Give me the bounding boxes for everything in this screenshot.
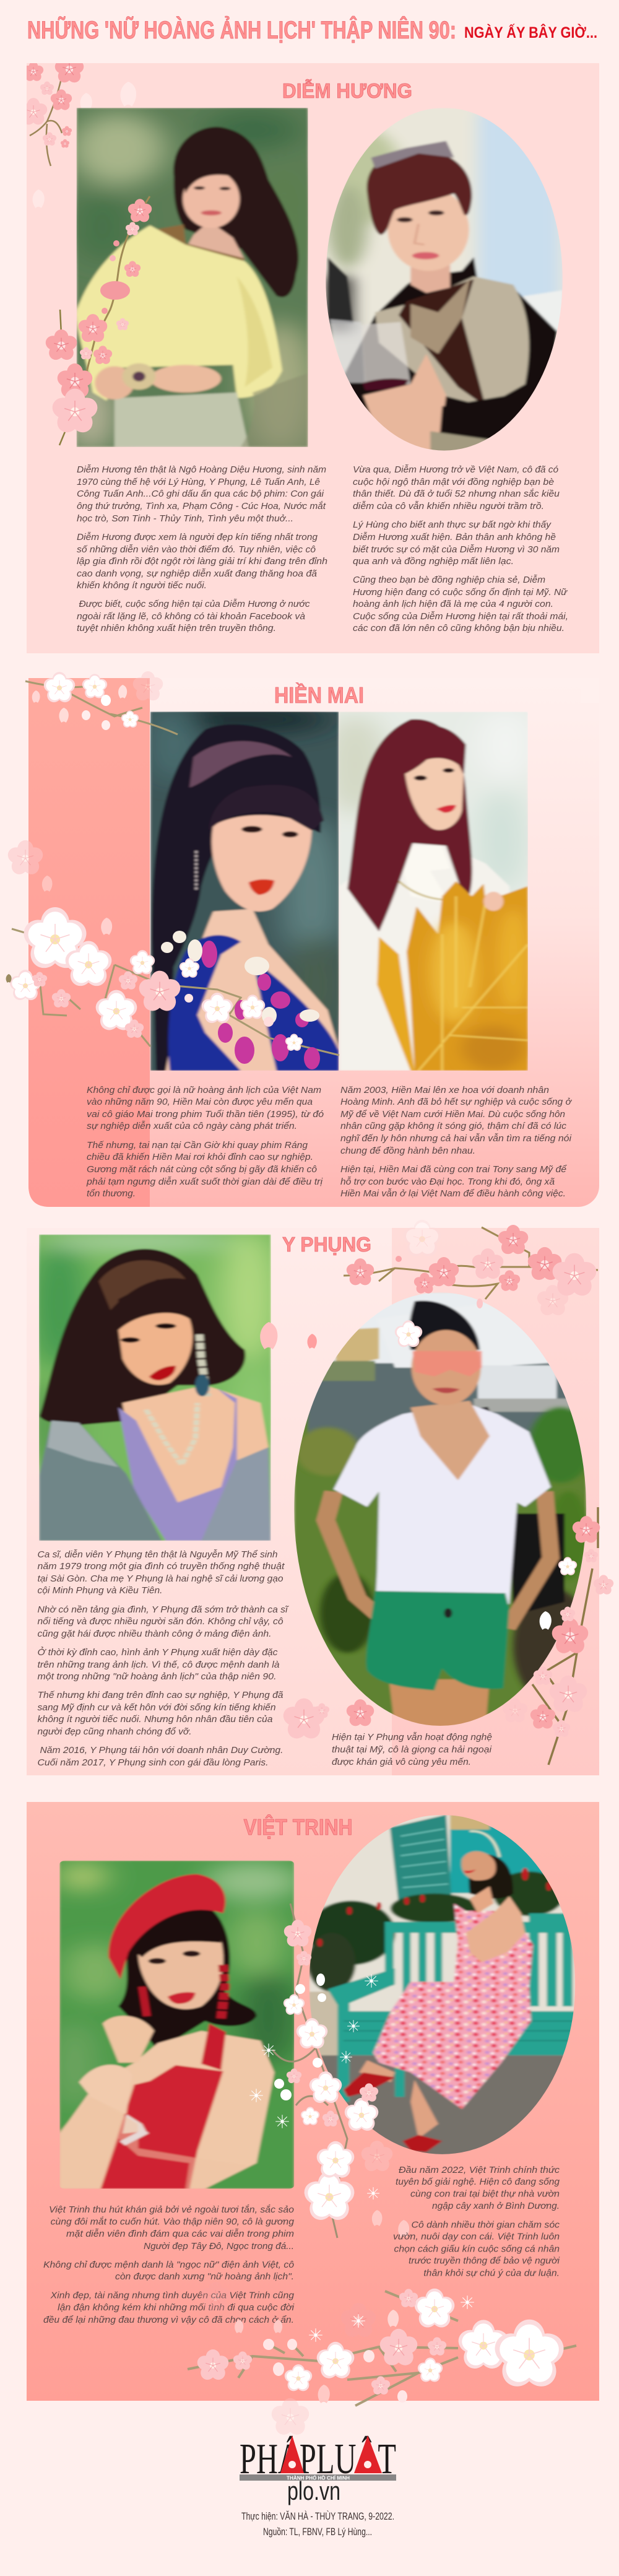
text: Diễm Hương left column: Diễm Hương tên thật là Ngô Hoàng Diệu Hương, sinh năm <box>77 464 326 475</box>
text: Diễm Hương left column: 1970 cùng thế hệ với Lý Hùng, Y Phụng, Lê Tuấn Anh, Lê <box>77 477 320 487</box>
text: Y Phụng left column: năm 1979 trong một gia đình có truyền thống nghệ thuật <box>37 1561 285 1572</box>
text: Hiền Mai left column: vai cô giáo Mai trong phim Tuổi thần tiên (1995), từ đó <box>87 1109 324 1120</box>
text: Y Phụng right column: thuật tại Mỹ, cô là giọng ca hải ngoại <box>332 1744 492 1755</box>
text: Y Phụng left column: nổi tiếng và được nhiều người săn đón. Không chỉ vậy, cô <box>37 1616 284 1627</box>
text: Y Phụng left column: cội Minh Phụng và Kiều Tiên. <box>37 1585 162 1596</box>
text: Việt Trinh left column: cùng đôi mắt to cuốn hút. Vào thập niên 90, cô là gương <box>51 2217 295 2227</box>
text: Hiền Mai left column: chiều đã khiến Hiền Mai rơi khỏi đỉnh cao sự nghiệp. <box>87 1152 313 1162</box>
text: Hiền Mai left column: tổn thương. <box>87 1188 136 1199</box>
title subtitle: NGÀY ẤY BÂY GIỜ... <box>464 23 597 41</box>
text: Y Phụng left column: trên những trang ảnh lịch. Vì thế, cô được mệnh danh là <box>37 1660 280 1670</box>
text: Diễm Hương left column: Công Tuấn Anh...Cô ghi dấu ấn qua các bộ phim: Con gái <box>77 489 324 499</box>
photo: present-day Hiền Mai with golden leaves <box>339 712 528 1071</box>
text: Việt Trinh right column <box>393 2165 560 2279</box>
text: Hiền Mai right column: Mỹ để về Việt Nam cưới Hiền Mai. Dù cuộc sống hôn <box>340 1109 565 1120</box>
text: Y Phụng left column: tại Sài Gòn. Cha mẹ Y Phụng là hai nghệ sĩ cải lương gạo <box>37 1573 284 1584</box>
logo url: plo.vn <box>287 2476 340 2505</box>
decoration: Y Phụng top blossom branch <box>344 1220 599 1318</box>
logo: Pháp Luật: PHÁPLUẬT <box>240 2435 396 2483</box>
text: Diễm Hương left column: ông thứ trưởng, Tình xa, Phạm Công - Cúc Hoa, Nước mắt <box>77 501 326 511</box>
text: Hiền Mai right column: nghĩ đến ly hôn nhưng cả hai vẫn vẫn tìm ra tiếng nói <box>340 1133 572 1144</box>
title main line: NHỮNG 'NỮ HOÀNG ẢNH LỊCH' THẬP NIÊN 90: <box>27 15 456 44</box>
text: Việt Trinh right column: trước truyền thông để bảo vệ người <box>409 2256 560 2266</box>
logo: Pháp Luật: THÀNH PHỐ HỒ CHÍ MINH <box>287 2474 350 2481</box>
text: Diễm Hương right column: hoàng ảnh lịch hiện đã là mẹ của 4 người con. <box>353 599 553 609</box>
panel: Y Phụng <box>27 1220 615 1775</box>
text: Y Phụng left column: Ở thời kỳ đỉnh cao, hình ảnh Y Phụng xuất hiện dày đặc <box>37 1647 278 1658</box>
text: Y Phụng left column: Cuối năm 2017, Y Phụng sinh con gái đầu lòng Paris. <box>37 1757 269 1768</box>
heading: Y Phụng: Y PHỤNG <box>282 1233 371 1256</box>
text: Diễm Hương right column: diễm của cô vẫn khiến nhiều người trầm trồ. <box>353 501 544 511</box>
decoration: Hiền Mai top blossom branch <box>25 671 178 734</box>
text: Diễm Hương right column <box>353 464 568 633</box>
text: Y Phụng right column <box>332 1732 492 1767</box>
text: Diễm Hương left column: ngoài rất lặng lẽ, cô không có tài khoản Facebook và <box>77 611 305 622</box>
text: Y Phụng left column: Thế nhưng khi đang trên đỉnh cao sự nghiệp, Y Phụng đã <box>37 1690 284 1700</box>
decoration: Y Phụng right vertical branch <box>281 1507 615 1765</box>
photo: young Y Phụng with green background <box>28 1230 276 1541</box>
heading: Việt Trinh: VIỆT TRINH <box>244 1814 353 1840</box>
text: Việt Trinh right column: vườn, nuôi dạy con cái. Việt Trinh luôn <box>393 2232 560 2242</box>
text: Diễm Hương right column: Cuộc sống của Diễm Hương hiện tại rất thoải mái, <box>353 611 568 622</box>
text: Y Phụng right column: được khán giả vô cùng yêu mến. <box>332 1757 471 1767</box>
text: Việt Trinh left column: Xinh đẹp, tài năng nhưng tình duyên của Việt Trinh cũng <box>50 2291 295 2301</box>
text: Diễm Hương left column: tuyệt nhiên không xuất hiện trên truyền thông. <box>77 623 276 633</box>
text: Hiền Mai left column <box>86 1085 324 1199</box>
text: Y Phụng left column: cũng gặt hái được nhiều thành công ở mảng điện ảnh. <box>37 1629 271 1639</box>
credits: Thực hiện: VĂN HÀ - THÙY TRANG, 9-2022. <box>241 2510 394 2522</box>
text: Diễm Hương left column <box>77 464 327 633</box>
decoration: top-left blossom branch <box>27 63 136 208</box>
photo: present-day Y Phụng in oval <box>294 1292 592 1728</box>
text: Diễm Hương right column: Diễm Hương xuất hiện. Bản thân anh không hề <box>353 532 556 542</box>
text: Hiền Mai right column <box>340 1085 573 1199</box>
decoration: Việt Trinh central blossom branch <box>249 1904 409 2238</box>
photo: present-day Việt Trinh on teal bench in oval <box>308 1815 576 2156</box>
decoration: Hiền Mai faint blossom <box>6 840 53 892</box>
text: Y Phụng left column: Năm 2016, Y Phụng tái hôn với doanh nhân Duy Cường. <box>40 1745 284 1756</box>
text: Diễm Hương right column: Cũng theo bạn bè đồng nghiệp chia sẻ, Diễm <box>353 575 545 585</box>
credits: Nguồn: TL, FBNV, FB Lý Hùng... <box>263 2526 372 2538</box>
text: Việt Trinh right column: Đầu năm 2022, Việt Trinh chính thức <box>399 2165 560 2175</box>
text: Việt Trinh left column: Việt Trinh thu hút khán giả bởi vẻ ngoài tươi tắn, sắc sảo <box>49 2204 294 2215</box>
photo: young Hiền Mai in blue dress <box>150 704 344 1071</box>
photo: young Việt Trinh in red beret <box>55 1861 300 2189</box>
text: Diễm Hương right column: Vừa qua, Diễm Hương trở về Việt Nam, cô đã có <box>353 464 558 475</box>
text: Việt Trinh right column: ngập cây xanh ở Bình Dương. <box>432 2201 560 2211</box>
panel: Việt Trinh <box>27 1802 599 2406</box>
text: Việt Trinh right column: Cô dành nhiều thời gian chăm sóc <box>411 2220 560 2230</box>
photo: present-day Diễm Hương in oval <box>326 108 563 453</box>
text: Hiền Mai left column: phải tạm ngưng diễn xuất suốt thời gian dài để điều trị <box>86 1177 323 1187</box>
text: Y Phụng left column: Nhờ có nền tảng gia đình, Y Phụng đã sớm trở thành ca sĩ <box>37 1604 289 1615</box>
text: Hiền Mai right column: Hiện tại, Hiền Mai đã cùng con trai Tony sang Mỹ để <box>340 1164 567 1175</box>
text: Diễm Hương right column: biết trước sự có mặt của Diễm Hương vì 30 năm <box>353 544 560 555</box>
footer <box>240 2435 396 2538</box>
panel: Diễm Hương <box>18 54 599 653</box>
text: Diễm Hương left column: số những diễn viên vào thời điểm đó. Tuy nhiên, việc cô <box>77 544 316 555</box>
text: Hiền Mai right column: nhân cũng gặp không ít sóng gió, thậm chí đã có lúc <box>340 1121 567 1131</box>
text: Diễm Hương left column: khiến không ít người tiếc nuối. <box>77 580 207 591</box>
text: Việt Trinh left column: mặt diễn viên đình đám qua các vai diễn trong phim <box>66 2229 294 2239</box>
decoration: Việt Trinh bottom blossom branch <box>188 2282 576 2406</box>
title <box>27 15 597 44</box>
text: Diễm Hương left column: học trò, Sơn Tinh - Thủy Tinh, Tình yêu một thuở... <box>77 513 293 524</box>
heading: Diễm Hương: DIỄM HƯƠNG <box>282 79 412 102</box>
text: Y Phụng left column: Ca sĩ, diễn viên Y Phụng tên thật là Nguyễn Mỹ Thể sinh <box>37 1549 277 1560</box>
text: Việt Trinh right column: cùng con trai tại biệt thự nhà vườn <box>410 2188 560 2200</box>
text: Diễm Hương right column: thân thiết. Dù đã ở tuổi 52 nhưng nhan sắc kiều <box>353 489 560 499</box>
text: Diễm Hương left column: cao danh vọng, sự nghiệp diễn xuất đang thăng hoa đã <box>77 568 318 579</box>
text: Diễm Hương right column: cuộc hội ngộ thân mật với đồng nghiệp bạn bè <box>353 477 554 487</box>
logo: Pháp Luật <box>240 2435 396 2483</box>
text: Hiền Mai right column: Hiền Mai vẫn ở lại Việt Nam để điều hành công việc. <box>340 1188 566 1199</box>
text: Diễm Hương left column: Được biết, cuộc sống hiện tại của Diễm Hương ở nước <box>79 599 310 609</box>
text: Diễm Hương right column: Hương hiện đang có cuộc sống ổn định tại Mỹ. Nữ <box>353 587 568 598</box>
panel: Hiền Mai <box>6 671 599 1207</box>
text: Hiền Mai left column: vào những năm 90, Hiền Mai còn được yêu mến qua <box>87 1097 313 1107</box>
text: Việt Trinh right column: tuyên bố giải nghệ. Hiện cô đang sống <box>396 2177 560 2187</box>
left coral strip <box>28 678 150 1207</box>
decoration: faint blossom under Việt Trinh panel <box>269 2398 311 2438</box>
text: Diễm Hương left column: Diễm Hương được xem là người đẹp kín tiếng nhất trong <box>77 532 318 542</box>
text: Việt Trinh left column: đều để lại những đau thương vì vậy cô đã chọn cách ở ẩn. <box>43 2315 294 2325</box>
decoration: Hiền Mai lower blossom branch with orchids <box>6 907 339 1069</box>
text: Hiền Mai left column: Thế nhưng, tai nạn tại Cần Giờ khi quay phim Ráng <box>87 1140 308 1151</box>
photo: young Diễm Hương in yellow sweater <box>67 108 316 453</box>
text: Diễm Hương right column: qua anh và đồng nghiệp mất liên lạc. <box>353 556 514 567</box>
text: Y Phụng left column: một trong những "nữ hoàng ảnh lịch" của thập niên 90. <box>37 1671 276 1682</box>
text: Việt Trinh left column <box>43 2204 295 2325</box>
text: Hiền Mai left column: sự nghiệp diễn xuất của cô ngày càng phát triển. <box>87 1121 297 1131</box>
text: Việt Trinh left column: lận đận không kém khi những mối tình đi qua cuộc đời <box>58 2302 295 2313</box>
text: Hiền Mai left column: Gương mặt rách nát cùng cột sống bị gãy đã khiến cô <box>87 1164 317 1175</box>
text: Việt Trinh left column: Không chỉ được mệnh danh là "ngọc nữ" điện ảnh Việt, cô <box>43 2260 294 2270</box>
text: Y Phụng left column: không ít người tiếc nuối. Nhưng hôn nhân đầu tiên của <box>37 1714 272 1725</box>
text: Việt Trinh left column: Người đẹp Tây Đô, Ngọc trong đá... <box>144 2241 294 2252</box>
text: Y Phụng left column <box>37 1549 289 1768</box>
text: Việt Trinh right column: thân khỏi sự chú ý của dư luận. <box>423 2268 560 2279</box>
credits <box>241 2510 394 2538</box>
text: Y Phụng right column: Hiện tại Y Phụng vẫn hoạt động nghệ <box>332 1732 492 1743</box>
text: Hiền Mai left column: Không chỉ được gọi là nữ hoàng ảnh lịch của Việt Nam <box>87 1085 321 1095</box>
decoration: falling petals and hair blossom <box>260 1320 424 1349</box>
decoration: blossoms over first photo <box>44 196 153 445</box>
text: Y Phụng left column: sang Mỹ định cư và kết hôn với đời sống kín tiếng khiến <box>37 1702 276 1713</box>
text: Việt Trinh right column: chọn cách giấu kín cuộc sống cá nhân <box>394 2244 560 2255</box>
text: Hiền Mai right column: hỗ trợ con bước vào Đại học. Trong khi đó, ông xã <box>340 1177 555 1187</box>
text: Hiền Mai right column: chung để đồng hành bên nhau. <box>340 1146 475 1156</box>
text: Diễm Hương right column: các con đã lớn nên cô cũng không bận bịu nhiều. <box>353 623 565 633</box>
text: Hiền Mai right column: Năm 2003, Hiền Mai lên xe hoa với doanh nhân <box>340 1085 549 1095</box>
text: Việt Trinh left column: còn được danh xưng "nữ hoàng ảnh lịch". <box>115 2271 294 2282</box>
text: Y Phụng left column: người đẹp cũng nhanh chóng đổ vỡ. <box>37 1726 192 1737</box>
text: Diễm Hương left column: lập gia đình rồi đột ngột rời làng giải trí khi đang trên đỉnh <box>77 556 327 567</box>
text: Hiền Mai right column: Hoàng Minh. Anh đã bỏ hết sự nghiệp và cuộc sống ở <box>340 1097 573 1107</box>
heading: Hiền Mai: HIỀN MAI <box>274 682 364 708</box>
text: Diễm Hương right column: Lý Hùng cho biết anh thực sự bất ngờ khi thấy <box>353 520 552 530</box>
